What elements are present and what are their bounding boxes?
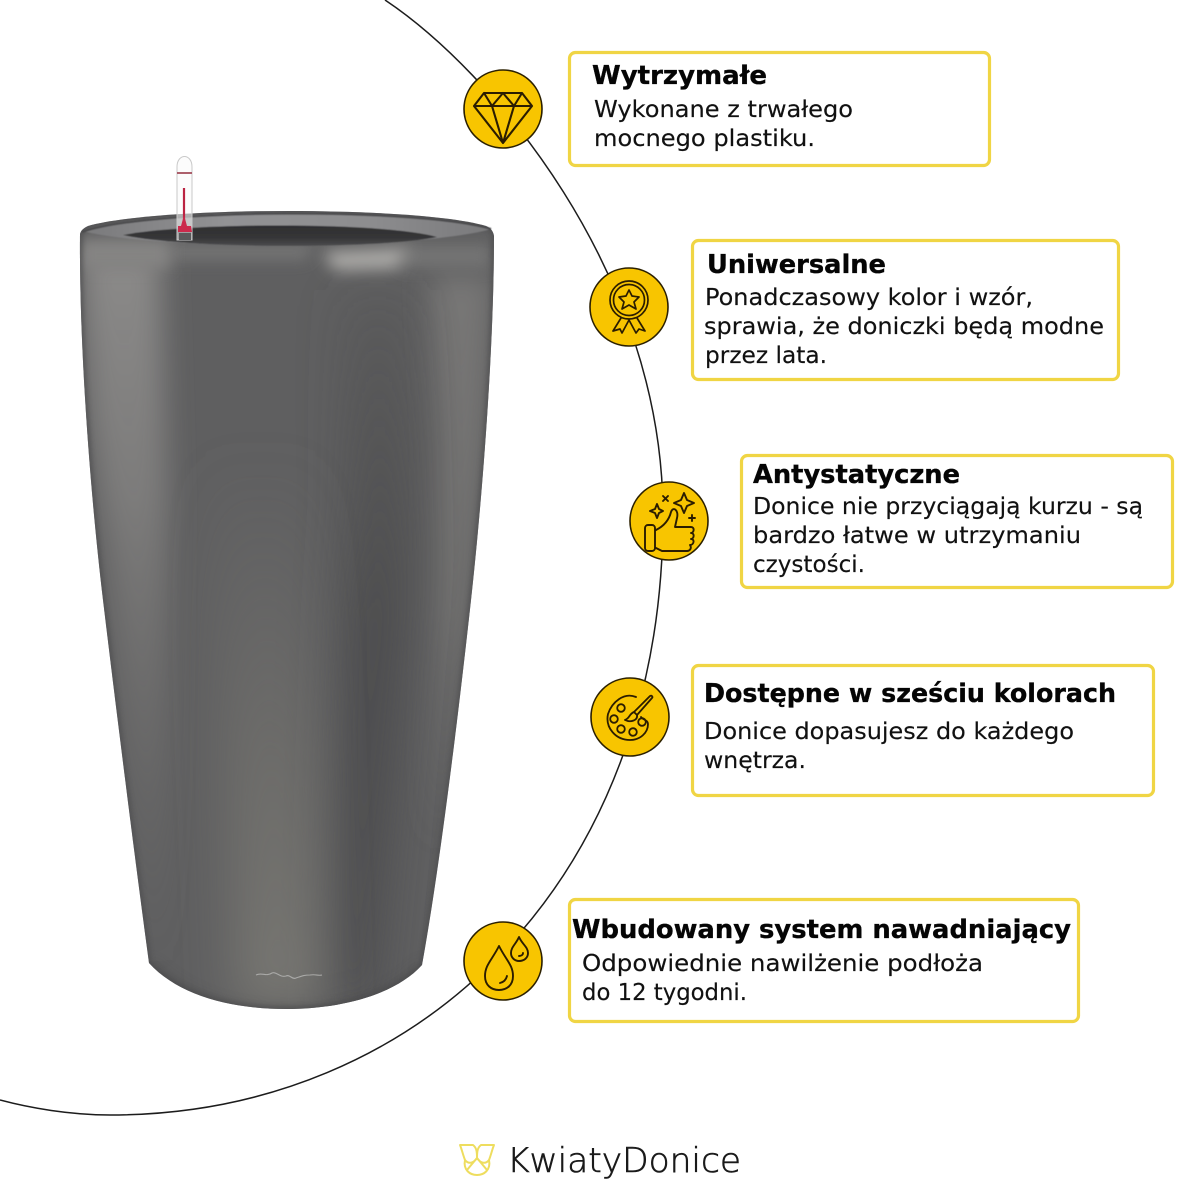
text: Uniwersalne description: Ponadczasowy kolor i wzór,	[705, 285, 1033, 311]
text: Dostępne description	[704, 719, 1074, 774]
pot body	[70, 205, 505, 1020]
text: Dostępne description: wnętrza.	[704, 748, 806, 774]
logo mark on pot	[256, 973, 322, 978]
text: Wbudowany description: do 12 tygodni.	[582, 980, 747, 1006]
icon: thumbs up with sparkles	[630, 482, 708, 560]
pot rim and opening	[82, 213, 491, 246]
panel: Wbudowany system nawadniający	[570, 900, 1078, 1022]
text: Dostępne description: Donice dopasujesz do każdego	[704, 719, 1074, 745]
heading: Uniwersalne: Uniwersalne	[707, 250, 886, 280]
icon: award rosette	[590, 268, 668, 346]
text: Antystatyczne description: bardzo łatwe w utrzymaniu	[753, 523, 1081, 549]
planter pot	[70, 156, 505, 1020]
logo wordmark: KwiatyDonice	[507, 1141, 741, 1181]
text: Uniwersalne description	[704, 285, 1104, 369]
text: Wbudowany description	[582, 951, 983, 1006]
text: Wytrzymałe description	[594, 97, 853, 152]
heading: Wytrzymałe: Wytrzymałe	[592, 61, 767, 91]
panel: Wytrzymałe	[570, 52, 990, 166]
icon: diamond	[464, 70, 542, 148]
water level indicator	[177, 156, 192, 240]
icon: paint palette	[591, 678, 669, 756]
icon: water drops	[464, 922, 542, 1000]
icon: butterfly logo mark	[460, 1145, 494, 1175]
text: Antystatyczne description: Donice nie przyciągają kurzu - są	[753, 494, 1143, 520]
text: Antystatyczne description: czystości.	[753, 552, 865, 578]
text: Wytrzymałe description: mocnego plastiku.	[594, 126, 815, 152]
logo: KwiatyDonice	[460, 1141, 741, 1181]
panel: Antystatyczne	[742, 456, 1172, 588]
text: Antystatyczne description	[753, 494, 1143, 578]
text: Wbudowany description: Odpowiednie nawilżenie podłoża	[582, 951, 983, 977]
heading: Wbudowany system nawadniający: Wbudowany system nawadniający	[572, 915, 1071, 945]
arc line connecting the icons	[0, 0, 663, 1115]
heading: Antystatyczne: Antystatyczne	[753, 460, 960, 490]
text: Wytrzymałe description: Wykonane z trwałego	[594, 97, 853, 123]
panel: Dostępne w sześciu kolorach	[692, 666, 1154, 796]
text: Uniwersalne description: przez lata.	[705, 343, 827, 369]
panel: Uniwersalne	[692, 240, 1118, 380]
heading: Dostępne w sześciu kolorach: Dostępne w sześciu kolorach	[704, 679, 1116, 709]
text: Uniwersalne description: sprawia, że doniczki będą modne	[704, 314, 1104, 340]
